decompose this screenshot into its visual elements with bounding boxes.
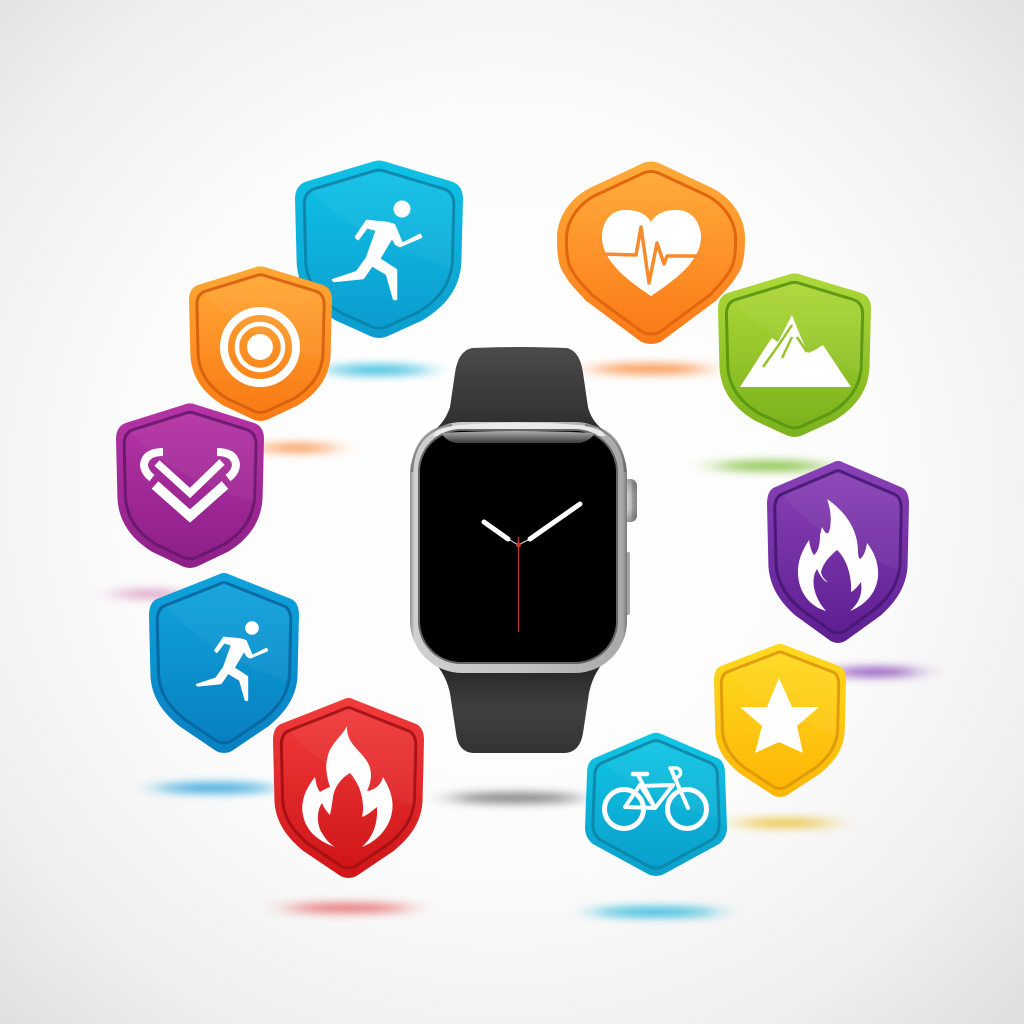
floor shadows — [116, 364, 919, 917]
icon: bicycle — [604, 768, 706, 828]
badge: cycling, cyan — [585, 733, 727, 876]
badge: star, yellow — [714, 644, 846, 797]
badge: heart chevron, purple — [116, 403, 264, 568]
icon: mountain — [740, 315, 851, 387]
icon: runner — [197, 621, 267, 700]
icon: star — [740, 678, 819, 753]
icon: runner — [333, 200, 421, 299]
hub — [510, 539, 530, 545]
case top highlight — [432, 422, 606, 436]
center pin — [516, 542, 521, 548]
hour hand — [484, 522, 508, 539]
icon: target rings — [224, 311, 296, 383]
second hand — [518, 537, 520, 632]
case shoulders — [412, 425, 625, 472]
case — [410, 422, 627, 673]
badge: flame, red — [273, 698, 424, 878]
icon: flame — [798, 499, 878, 611]
badge: running, blue — [149, 573, 299, 753]
lower strap — [436, 664, 602, 753]
screen — [419, 430, 617, 663]
icon: double chevron heart — [144, 452, 236, 516]
side button — [625, 552, 630, 615]
minute hand — [530, 504, 580, 539]
smartwatch — [410, 347, 637, 753]
icon: heart with pulse — [602, 210, 701, 296]
icon: flame — [302, 726, 393, 847]
badge: running, cyan — [295, 160, 463, 338]
upper strap — [435, 347, 603, 430]
screen glare — [441, 431, 595, 443]
badge: flame, purple — [767, 461, 909, 643]
badge: mountain, green — [718, 273, 871, 437]
badge: heart rate, orange — [557, 161, 745, 344]
crown — [621, 479, 637, 522]
badge: target, orange — [189, 266, 332, 421]
